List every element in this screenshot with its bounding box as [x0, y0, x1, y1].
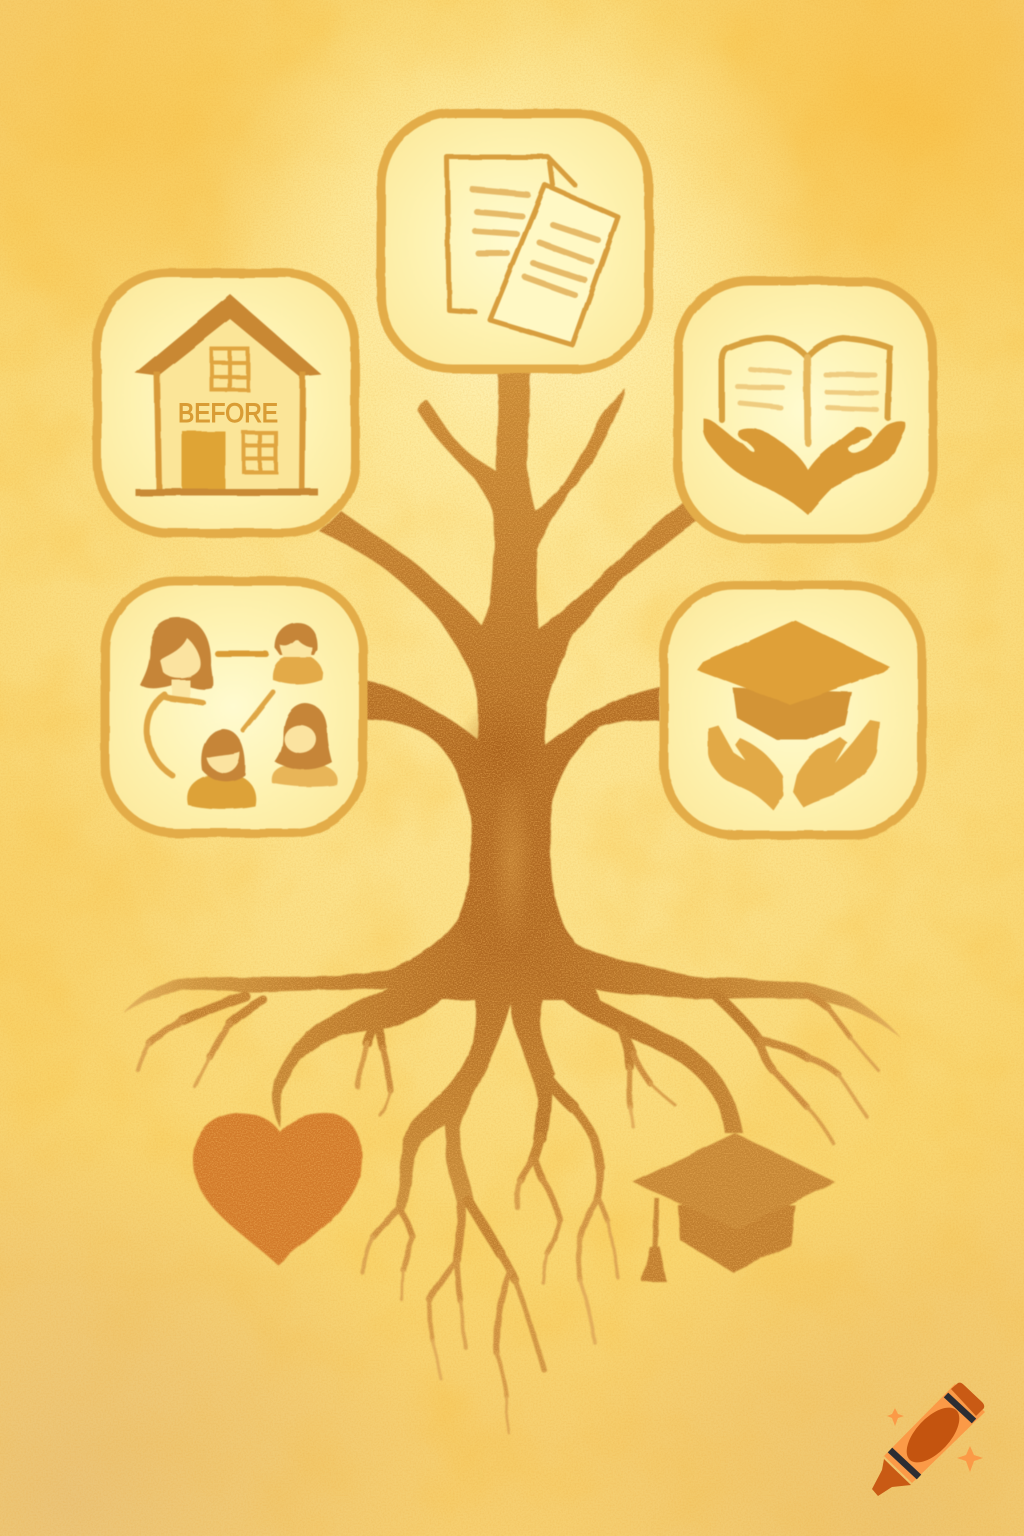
root: to heart — [273, 940, 482, 1128]
trunk and branches — [320, 368, 699, 1000]
icon: house — [135, 294, 322, 492]
rootlets: left — [138, 996, 390, 1115]
panel: before house — [97, 273, 355, 533]
rootlets — [138, 994, 878, 1432]
icon: hands under book — [703, 418, 905, 515]
panel: documents — [381, 113, 649, 369]
root: far left — [123, 920, 480, 1013]
panel: graduation cap and hands — [664, 585, 922, 835]
icon: heart — [193, 1113, 362, 1265]
icon: connected people — [140, 618, 338, 809]
rootlets: centre left — [363, 1200, 544, 1432]
icon: caring hands — [708, 720, 880, 810]
root: centre left — [396, 960, 514, 1215]
rootlets: centre right — [517, 1080, 618, 1343]
icon: graduation cap — [697, 620, 890, 810]
root: to graduation cap — [525, 935, 743, 1133]
panel: people network — [105, 581, 363, 833]
icon: papers — [447, 157, 618, 345]
tree: trunk, branches and roots — [123, 368, 900, 1432]
root: far right — [540, 915, 900, 1037]
icon: open book — [703, 338, 905, 515]
root: centre right — [505, 960, 556, 1107]
icon: graduation cap on roots — [633, 1133, 835, 1282]
text: before label: BEFORE — [178, 398, 278, 428]
rootlets: right — [622, 994, 878, 1143]
panel: open book and hands — [678, 281, 933, 539]
logo: crayon with sparkles — [872, 1383, 985, 1496]
